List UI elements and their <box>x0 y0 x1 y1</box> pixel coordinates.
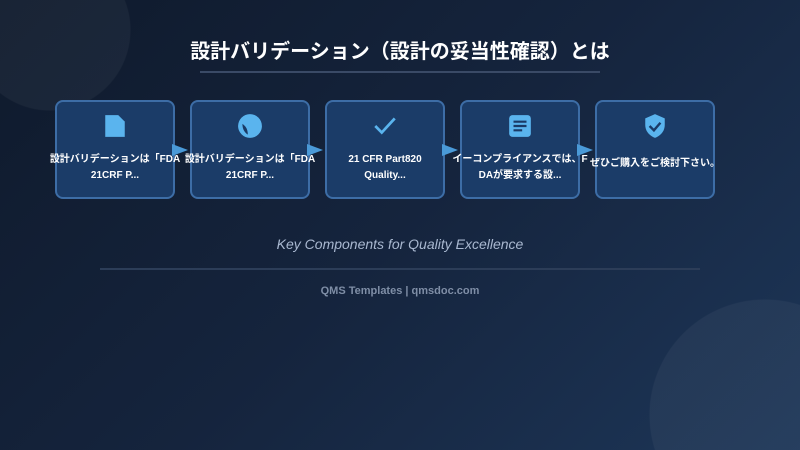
subtitle: Key Components for Quality Excellence <box>277 236 523 252</box>
card 5: ぜひご購入をご検討下さい。 <box>590 158 720 169</box>
card 5 <box>595 100 715 199</box>
title: 設計バリデーション（設計の妥当性確認）とは <box>190 41 610 63</box>
icon: document <box>105 115 125 137</box>
card 1: 21CRF P... <box>91 170 139 181</box>
footer: QMS Templates | qmsdoc.com <box>321 285 479 297</box>
arrow 4 <box>577 144 593 156</box>
card 3 <box>325 100 445 199</box>
card 1: 設計バリデーションは「FDA <box>50 154 180 165</box>
arrow 3 <box>442 144 458 156</box>
card 1 <box>55 100 175 199</box>
card 2: 設計バリデーションは「FDA <box>185 154 315 165</box>
icon: check <box>374 118 396 134</box>
card 3: 21 CFR Part820 <box>348 154 422 165</box>
card 3: Quality... <box>364 170 406 181</box>
card 4 <box>460 100 580 199</box>
card 2: 21CRF P... <box>226 170 274 181</box>
icon: list <box>509 115 531 137</box>
arrow 2 <box>307 144 323 156</box>
icon: shield <box>645 114 665 138</box>
card 2 <box>190 100 310 199</box>
arrow 1 <box>172 144 188 156</box>
card 4: イーコンプライアンスでは、F <box>452 154 588 165</box>
card 4: DAが要求する設... <box>479 170 561 181</box>
icon: globe <box>238 114 262 138</box>
